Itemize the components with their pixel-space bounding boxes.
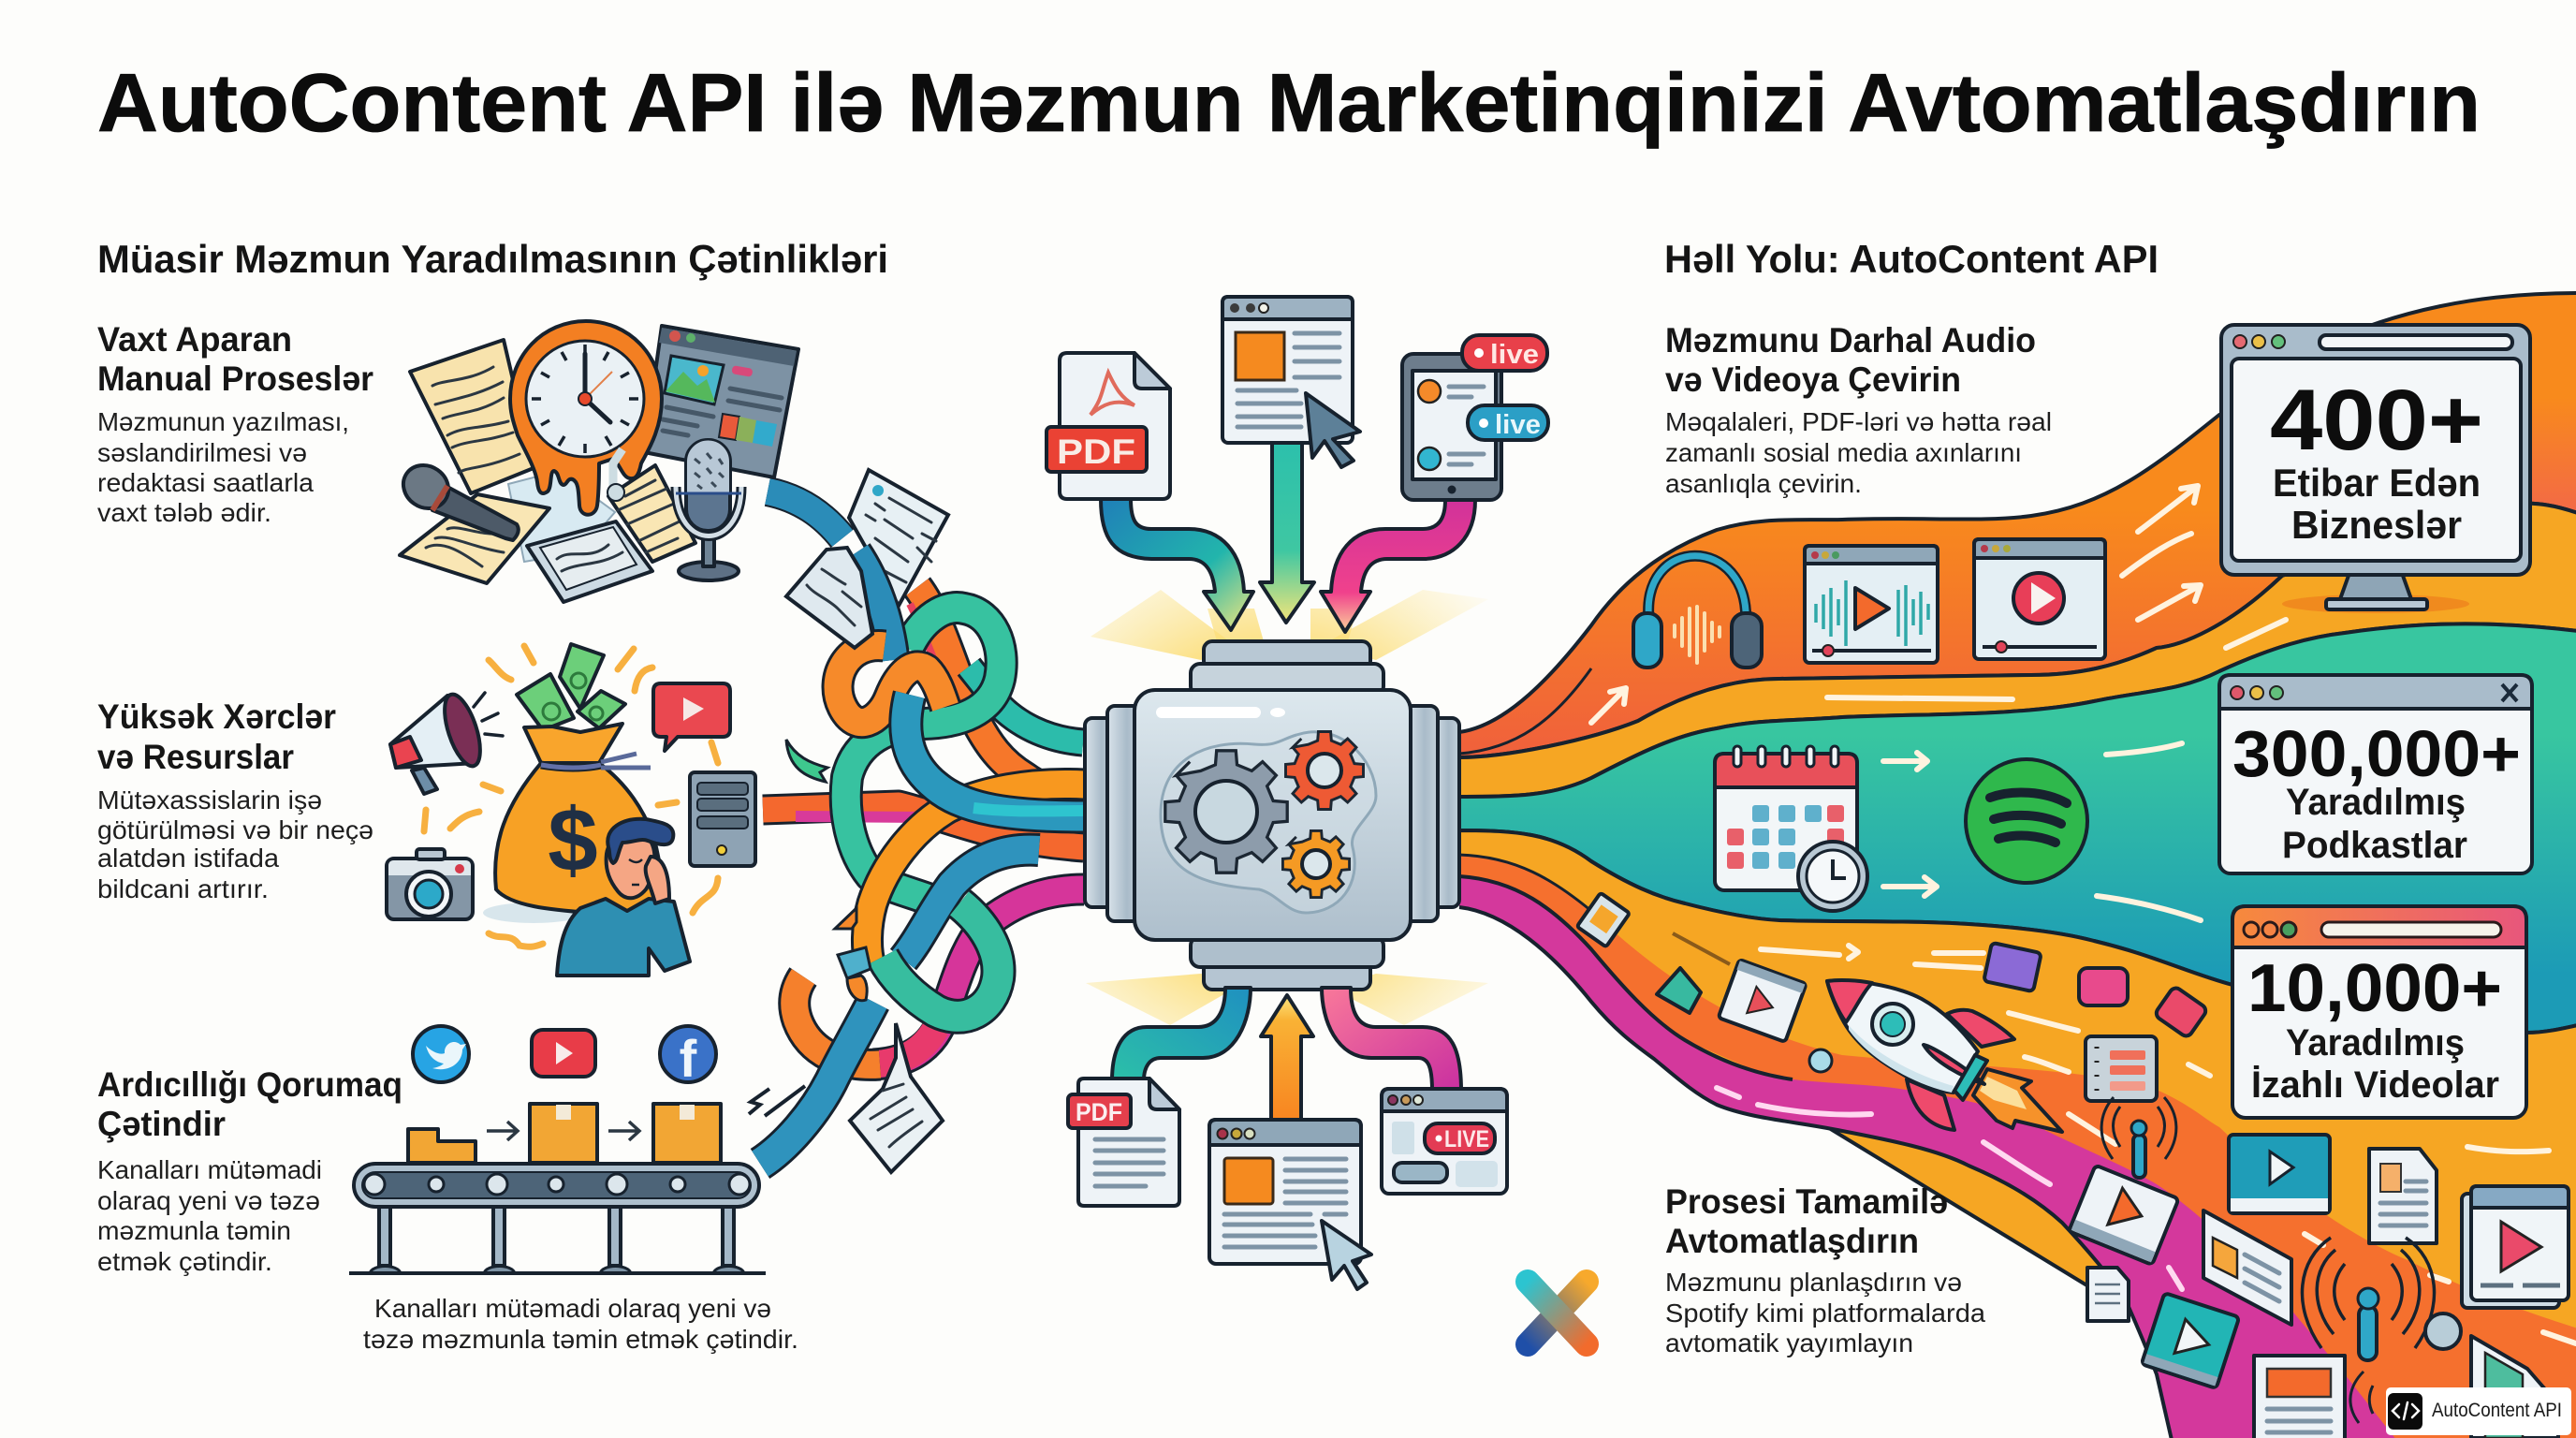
panel: challenges <box>97 237 888 1354</box>
pipe arrows into the machine <box>1101 443 1475 632</box>
solution 1 text: zamanlı sosial media axınlarını <box>1665 438 2022 467</box>
stat card: 10,000+: Yaradılmış <box>2286 1022 2465 1064</box>
icon: server <box>690 772 755 866</box>
icon: YouTube <box>532 1030 595 1077</box>
rocket centre fin <box>1924 1045 1984 1084</box>
icon: tilted video window <box>1719 960 1807 1042</box>
illustration: high costs <box>387 644 755 976</box>
badge: AutoContent API <box>2386 1387 2571 1435</box>
challenge 2 text: Mütəxassislarin işə <box>97 785 322 814</box>
rocket flame <box>1973 1069 2062 1132</box>
conveyor caption <box>363 1294 798 1354</box>
solution 1 text: asanlıqla çevirin. <box>1665 469 1862 498</box>
icon: clock badge <box>1798 842 1867 911</box>
badge: live red: live <box>1490 340 1539 370</box>
solution 1 text: və Videoya Çevirin <box>1665 360 1961 399</box>
challenge 1 text: redaktasi saatlarla <box>97 468 314 497</box>
icon: handheld microphone <box>395 457 519 540</box>
icon: PDF document bottom <box>1068 1078 1179 1206</box>
challenge 1 text: Məzmunun yazılması, <box>97 407 349 436</box>
central machine <box>1085 641 1459 990</box>
icon: podcast signal large <box>2302 1238 2435 1360</box>
illustration: manual processes <box>395 321 798 602</box>
icon: torn paper lower <box>850 1023 943 1172</box>
stat card: 400+ monitor: 400+ <box>2270 373 2483 468</box>
lightning marks <box>749 1086 805 1116</box>
icon: teal tile <box>1657 968 1701 1013</box>
challenge 1 text <box>97 320 373 527</box>
icon: purple tile <box>1983 943 2042 991</box>
icon: tilted orange video <box>2069 1166 2179 1265</box>
solution 2 text: avtomatik yayımlayın <box>1665 1328 1913 1357</box>
solution 2 text <box>1665 1182 1985 1357</box>
icon: article browser bottom <box>1209 1120 1371 1289</box>
icon: orange gear <box>1282 830 1350 898</box>
streams flowing out of the machine <box>1459 293 2576 1438</box>
icon: document <box>2369 1149 2437 1243</box>
arrow: from PDF <box>1101 499 1253 630</box>
challenge 3 text: etmək çətindir. <box>97 1247 272 1276</box>
icon: red gear <box>1286 732 1363 809</box>
challenge 2 text: alatdən istifada <box>97 844 279 873</box>
rocket nozzle <box>1954 1055 1987 1100</box>
icon: PDF document top <box>1046 353 1170 499</box>
heading: challenges: Müasir Məzmun Yaradılmasının Çətinlikləri <box>97 237 888 281</box>
heading: solution: Həll Yolu: AutoContent API <box>1664 237 2159 281</box>
stat card: 300,000+: Yaradılmış <box>2286 782 2466 823</box>
speed highlights <box>1591 486 2576 1343</box>
icon: small document <box>2087 1268 2129 1321</box>
icon: megaphone <box>390 690 503 794</box>
rocket porthole <box>1872 1004 1913 1045</box>
arrow: orange up <box>1261 995 1313 1122</box>
stat card: 10,000+: 10,000+ <box>2247 951 2502 1026</box>
stat card: 10,000+: İzahlı Videolar <box>2251 1064 2499 1106</box>
stream icons: schedule and publish <box>1715 746 2087 911</box>
icon: torn paper upper <box>849 470 948 606</box>
icon: Facebook: f <box>680 1029 697 1088</box>
rocket top fin <box>1947 1010 2014 1047</box>
pipe: magenta to live window <box>1322 988 1461 1091</box>
solution 2 text: Prosesi Tamamilə <box>1665 1182 1948 1221</box>
stat card: 300,000+ <box>2219 675 2532 873</box>
icon: tilted teal video <box>2142 1293 2239 1388</box>
challenge 2 text: bildcani artırır. <box>97 874 269 903</box>
icon: video speech bubble <box>653 683 730 751</box>
icon: tilted article <box>2203 1211 2291 1325</box>
icon: round tile <box>2425 1313 2461 1349</box>
icon: camera <box>387 849 473 919</box>
rope fragments <box>786 740 871 1001</box>
icon: article browser top <box>1222 297 1360 467</box>
arrow: from article <box>1260 443 1314 623</box>
challenge 2 text: Yüksək Xərclər <box>97 697 336 736</box>
icon: pink tile <box>2079 968 2128 1005</box>
solution 1 text: Məzmunu Darhal Audio <box>1665 321 2036 360</box>
title: AutoContent API ilə Məzmun Marketinqinizi Avtomatlaşdırın <box>97 56 2481 149</box>
badge: live blue: live <box>1495 410 1541 440</box>
sparks <box>424 646 718 946</box>
conveyor caption: təzə məzmunla təmin etmək çətindir. <box>363 1325 798 1354</box>
stream: orange right piece <box>2340 293 2576 524</box>
icon: worried person <box>557 819 690 976</box>
challenge 1 text: səslandirilmesi və <box>97 438 307 467</box>
icon: bottom right document <box>2471 1336 2558 1438</box>
icon: teal video <box>2229 1135 2330 1213</box>
badge: AutoContent API: AutoContent API <box>2432 1400 2562 1421</box>
icon: headphones <box>1633 556 1762 668</box>
icon: tilted image tile <box>1577 893 1630 946</box>
stream icons: audio and video <box>1633 539 2105 668</box>
icon: large gear <box>1165 751 1287 873</box>
badge: live blue <box>1468 405 1548 440</box>
light burst around the machine <box>1086 590 1488 1025</box>
icon: live window bottom <box>1382 1089 1507 1194</box>
icon: phone with live badges <box>1402 335 1548 500</box>
icon: audio video window <box>1805 546 1938 663</box>
challenge 1 text: vaxt tələb ədir. <box>97 498 271 527</box>
icon: podcast signal bottom <box>2350 1372 2373 1423</box>
stat card: 10,000+ <box>2232 906 2526 1118</box>
icon: PDF document top: PDF <box>1057 433 1135 471</box>
icon: round dot <box>1809 1049 1832 1072</box>
icon: rocket <box>1827 980 2062 1132</box>
boxes and arrows <box>408 1104 721 1163</box>
stat card: 400+ monitor <box>2221 325 2530 613</box>
challenge 3 text: məzmunla təmin <box>97 1216 291 1245</box>
icon: cursor <box>1322 1221 1371 1289</box>
rocket nose <box>1827 980 1872 1022</box>
stat card: 300,000+: Podkastlar <box>2282 825 2467 866</box>
stream: red-orange lower band <box>1459 855 2576 1438</box>
icon: money bag <box>495 724 660 913</box>
stat card: 400+ monitor: Bizneslər <box>2291 503 2462 547</box>
illustration: conveyor <box>349 1026 805 1275</box>
challenge 3 text: Çətindir <box>97 1105 226 1143</box>
challenge 1 text: Vaxt Aparan <box>97 320 292 359</box>
icon: Twitter <box>413 1026 469 1082</box>
icon: scribbled paper <box>410 340 534 493</box>
solution 1 text <box>1665 321 2052 498</box>
conveyor belt <box>349 1164 766 1275</box>
pipes leaving machine downward <box>1112 988 1461 1122</box>
challenge 2 text: və Resurslar <box>97 738 294 776</box>
icon: bag shadow <box>483 902 584 923</box>
ropes: centre knot <box>760 552 1084 1164</box>
icon: Facebook <box>660 1026 716 1088</box>
solution 2 text: Spotify kimi platformalarda <box>1665 1299 1985 1328</box>
stream icons: published content <box>1577 893 2569 1438</box>
panel: solution text <box>1664 237 2159 1357</box>
pipe: teal to PDF <box>1112 988 1251 1080</box>
stat card: 400+ monitor: Etibar Edən <box>2273 461 2481 505</box>
challenge 1 text: Manual Proseslər <box>97 360 373 398</box>
icon: bottom document <box>2254 1356 2345 1438</box>
icon: podcast signal small <box>2101 1097 2176 1178</box>
stream: orange audio band <box>1459 374 2340 757</box>
icon: AutoContent X logo <box>1528 1282 1587 1344</box>
challenge 3 text <box>97 1065 402 1276</box>
solution 2 text: Avtomatlaşdırın <box>1665 1222 1919 1260</box>
conveyor caption: Kanalları mütəmadi olaraq yeni və <box>374 1294 771 1323</box>
solution 1 text: Məqalaleri, PDF-ləri və hətta rəal <box>1665 407 2052 436</box>
icon: red tile <box>2154 986 2208 1038</box>
icon: desk microphone <box>676 440 741 580</box>
solution 2 text: Məzmunu planlaşdırın və <box>1665 1268 1962 1297</box>
icon: papers on desk <box>400 465 695 602</box>
icon: cursor <box>1306 393 1360 467</box>
rocket bottom fin <box>1907 1079 1954 1130</box>
tangled ropes from challenges into the machine <box>763 492 1084 1064</box>
icon: money bag: $ <box>548 790 598 890</box>
icon: Spotify <box>1966 759 2087 883</box>
badge: live red <box>1462 335 1547 371</box>
rocket body <box>1827 980 1978 1093</box>
stream: yellow lower band <box>1459 830 2576 1438</box>
icon: melting clock <box>510 321 662 515</box>
icon: list tile <box>2086 1036 2157 1101</box>
icon: live window bottom: LIVE <box>1444 1126 1489 1152</box>
arrow: from live stream <box>1321 500 1475 632</box>
icon: PDF document bottom: PDF <box>1076 1098 1122 1126</box>
challenge 2 text: götürülməsi və bir neçə <box>97 815 373 844</box>
icon: calendar <box>1715 746 1867 911</box>
stream: magenta band <box>1459 876 2396 1438</box>
icon: code brackets <box>2388 1393 2422 1430</box>
icon: browser with play <box>2462 1186 2569 1308</box>
stream: yellow band <box>1459 503 2576 797</box>
stat card: 300,000+: 300,000+ <box>2232 717 2521 790</box>
challenge 3 text: olaraq yeni və təzə <box>97 1186 320 1215</box>
icon: money bills <box>517 644 625 730</box>
icon: torn paper left <box>786 548 872 648</box>
challenge 2 text <box>97 697 373 903</box>
icon: browser window <box>644 326 798 477</box>
challenge 3 text: Kanalları mütəmadi <box>97 1155 322 1184</box>
stream: teal band <box>1459 624 2576 1033</box>
icon: play window <box>1974 539 2105 659</box>
challenge 3 text: Ardıcıllığı Qorumaq <box>97 1065 402 1104</box>
